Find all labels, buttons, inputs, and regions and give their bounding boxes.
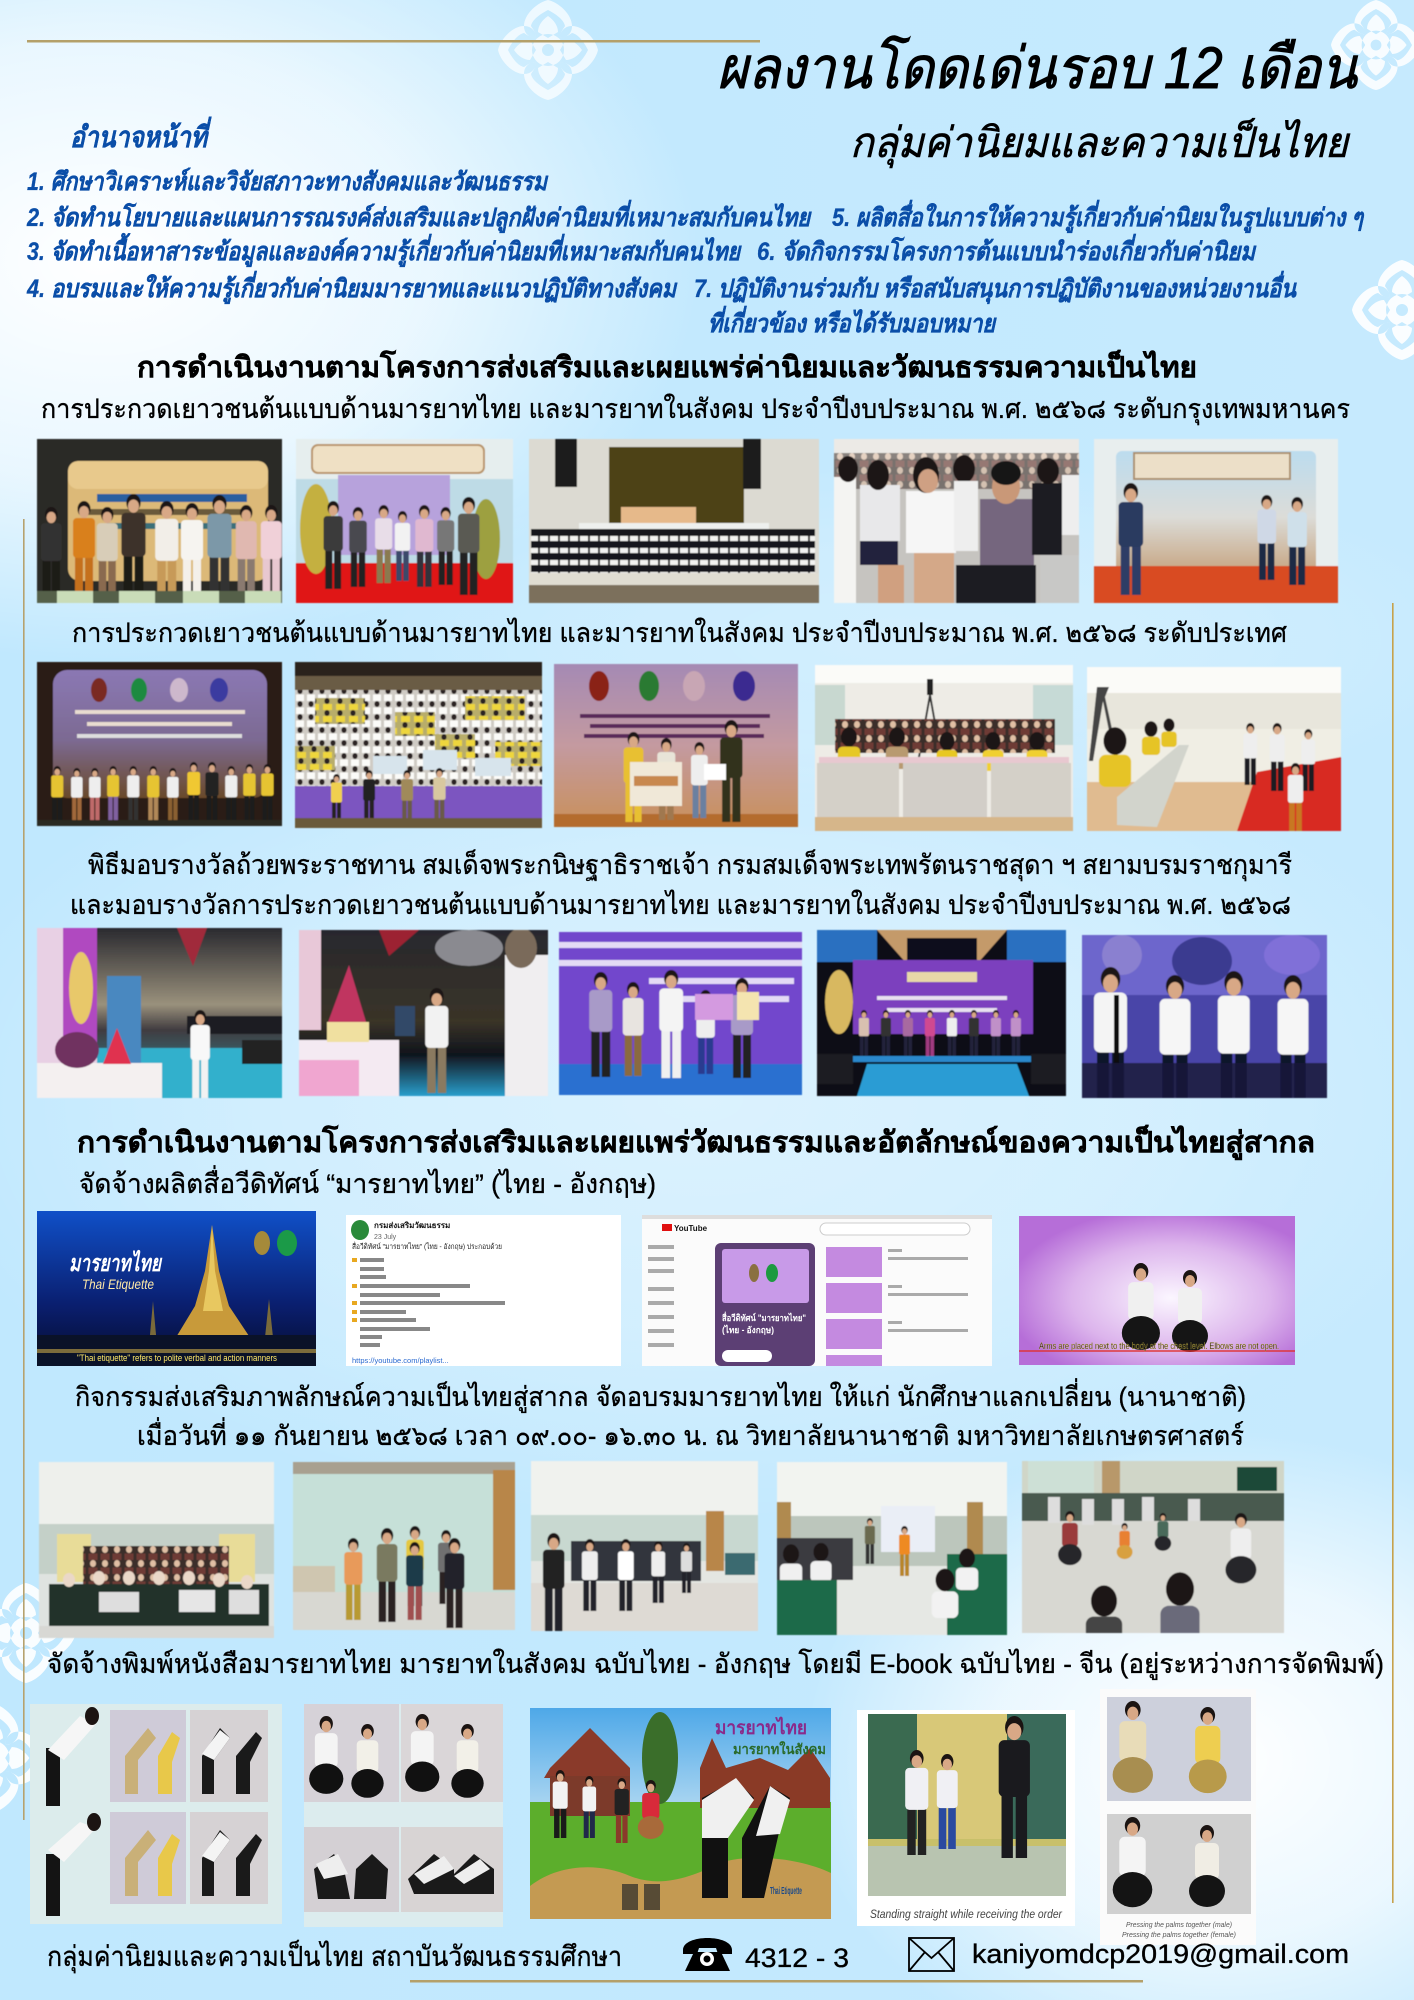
footer organisation: กลุ่มค่านิยมและความเป็นไทย สถาบันวัฒนธรรมศึกษา: [47, 1939, 622, 1974]
video still: wai gesture: [1019, 1216, 1295, 1365]
youtube playlist screenshot: [642, 1215, 992, 1366]
book page: pressing palms: Pressing the palms together (female): [1122, 1932, 1236, 1939]
book page: receiving order: [857, 1710, 1075, 1926]
email address: kaniyomdcp2019@gmail.com: [972, 1939, 1349, 1969]
photo: large group on stage: [528, 438, 820, 604]
duties text block: [26, 116, 1364, 338]
photo: wide stage with screen: [816, 929, 1067, 1097]
duties text block: 6. จัดกิจกรรมโครงการต้นแบบนำร่องเกี่ยวกับค่านิยม: [757, 233, 1257, 266]
photo: seated trainees: [530, 1460, 758, 1632]
photo: award handover: [553, 663, 799, 828]
photo: group with curtains: [292, 1461, 516, 1630]
photo: ceremony altar: [36, 927, 283, 1099]
photo: group on red carpet: [295, 439, 514, 604]
photo: training group: [38, 1462, 274, 1638]
facebook post screenshot: [346, 1215, 621, 1366]
book page: bowing: [30, 1704, 282, 1924]
photo row 3: [37, 928, 1327, 1117]
photo row 2: [37, 662, 1341, 833]
duties text block: 7. ปฏิบัติงานร่วมกับ หรือสนับสนุนการปฏิบัติงานของหน่วยงานอื่น: [694, 270, 1298, 304]
video cover: Wat Arun: [37, 1211, 316, 1366]
caption: etiquette training: เมื่อวันที่ ๑๑ กันยายน ๒๕๖๘ เวลา ๐๙.๐๐- ๑๖.๓๐ น. ณ วิทยาลัยนานาชาติ มหาวิทยาลัยเกษตรศาสตร์: [137, 1417, 1244, 1451]
title: ผลงานโดดเด่นรอบ 12 เดือน: [717, 35, 1358, 101]
subtitle: กลุ่มค่านิยมและความเป็นไทย: [850, 118, 1350, 168]
duties text block: 4. อบรมและให้ความรู้เกี่ยวกับค่านิยมมารยาทและแนวปฏิบัติทางสังคม: [26, 270, 678, 304]
facebook post screenshot: สื่อวีดิทัศน์ "มารยาทไทย" (ไทย - อังกฤษ) ประกอบด้วย: [352, 1241, 502, 1251]
photo: group on national stage: [36, 661, 283, 827]
photo: purple stage group: [558, 931, 803, 1096]
book cover: มารยาทไทย: [715, 1716, 807, 1739]
book page: kneeling: [304, 1704, 503, 1927]
photo: seated students in purple light: [1081, 934, 1328, 1099]
duties heading: อำนาจหน้าที่: [70, 116, 212, 154]
photo: student contest on backdrop: [1093, 438, 1339, 604]
photo: contest room: [1086, 666, 1342, 832]
facebook post screenshot: 23 July: [374, 1234, 397, 1241]
photo: student bows at altar: [298, 929, 549, 1097]
photo: lecturer in front of screen: [776, 1462, 1008, 1636]
duties text block: 2. จัดทำนโยบายและแผนการรณรงค์ส่งเสริมและปลูกฝังค่านิยมที่เหมาะสมกับคนไทย: [26, 199, 812, 233]
youtube playlist screenshot: (ไทย - อังกฤษ): [722, 1324, 774, 1335]
duties text block: 1. ศึกษาวิเคราะห์และวิจัยสภาวะทางสังคมและวัฒนธรรม: [27, 167, 549, 196]
phone number: 4312 - 3: [745, 1943, 849, 1973]
photo: judges table: [814, 664, 1074, 832]
caption: book printing: จัดจ้างพิมพ์หนังสือมารยาทไทย มารยาทในสังคม ฉบับไทย - อังกฤษ โดยมี E-book ฉบับไทย - จีน (อยู่ระหว่างการจัดพิมพ์): [47, 1648, 1384, 1680]
caption: row 2: การประกวดเยาวชนต้นแบบด้านมารยาทไทย และมารยาทในสังคม ประจำปีงบประมาณ พ.ศ. ๒๕๖๘ ระดับประเทศ: [72, 617, 1287, 648]
photo row 5: [39, 1461, 1284, 1653]
duties text block: ที่เกี่ยวข้อง หรือได้รับมอบหมาย: [708, 305, 997, 338]
book page: pressing palms: Pressing the palms together (male): [1126, 1922, 1232, 1929]
book page: pressing palms: [1100, 1689, 1256, 1945]
caption: row 3: พิธีมอบรางวัลถ้วยพระราชทาน สมเด็จพระกนิษฐาธิราชเจ้า กรมสมเด็จพระเทพรัตนราชสุดา ฯ สยามบรมราชกุมารี: [88, 847, 1292, 882]
caption: row 3: [70, 847, 1292, 920]
heading: section 1: การดำเนินงานตามโครงการส่งเสริมและเผยแพร่ค่านิยมและวัฒนธรรมความเป็นไทย: [137, 349, 1197, 384]
book cover: [530, 1708, 831, 1919]
photo: seated on floor: [1021, 1460, 1285, 1634]
caption: etiquette training: [75, 1378, 1246, 1451]
book pages row: [30, 1689, 1256, 1945]
youtube playlist screenshot: YouTube: [674, 1224, 708, 1233]
footer: [47, 1938, 1349, 1974]
video cover: Wat Arun: Thai Etiquette: [82, 1276, 154, 1292]
photo row 1: [37, 439, 1338, 606]
caption: row 3: และมอบรางวัลการประกวดเยาวชนต้นแบบด้านมารยาทไทย และมารยาทในสังคม ประจำปีงบประมาณ พ.ศ. ๒๕๖๘: [70, 889, 1291, 920]
caption: row 1: การประกวดเยาวชนต้นแบบด้านมารยาทไทย และมารยาทในสังคม ประจำปีงบประมาณ พ.ศ. ๒๕๖๘ ระดับกรุงเทพมหานคร: [41, 393, 1350, 426]
caption: video production: จัดจ้างผลิตสื่อวีดิทัศน์ “มารยาทไทย” (ไทย - อังกฤษ): [79, 1165, 656, 1199]
icon: envelope: [909, 1938, 954, 1971]
facebook post screenshot: https://youtube.com/playlist...: [352, 1356, 449, 1365]
caption: etiquette training: กิจกรรมส่งเสริมภาพลักษณ์ความเป็นไทยสู่สากล จัดอบรมมารยาทไทย ให้แก่ นักศึกษาแลกเปลี่ยน (นานาชาติ): [75, 1378, 1246, 1413]
facebook post screenshot: กรมส่งเสริมวัฒนธรรม: [374, 1221, 450, 1230]
photo: seated students: [833, 438, 1080, 604]
heading: section 2: การดำเนินงานตามโครงการส่งเสริมและเผยแพร่วัฒนธรรมและอัตลักษณ์ของความเป็นไทยสู่สากล: [77, 1124, 1315, 1160]
icon: telephone: [683, 1938, 732, 1971]
youtube playlist screenshot: สื่อวีดิทัศน์ "มารยาทไทย": [722, 1311, 806, 1323]
photo: auditorium crowd: [294, 661, 543, 829]
media row: [37, 1211, 1295, 1366]
photo: group in front of banner: [36, 438, 283, 604]
book cover: มารยาทในสังคม: [733, 1740, 826, 1757]
video cover: Wat Arun: มารยาทไทย: [69, 1249, 163, 1276]
duties text block: 3. จัดทำเนื้อหาสาระข้อมูลและองค์ความรู้เกี่ยวกับค่านิยมที่เหมาะสมกับคนไทย: [27, 233, 742, 267]
video cover: Wat Arun: "Thai etiquette" refers to polite verbal and action manners: [77, 1353, 277, 1363]
